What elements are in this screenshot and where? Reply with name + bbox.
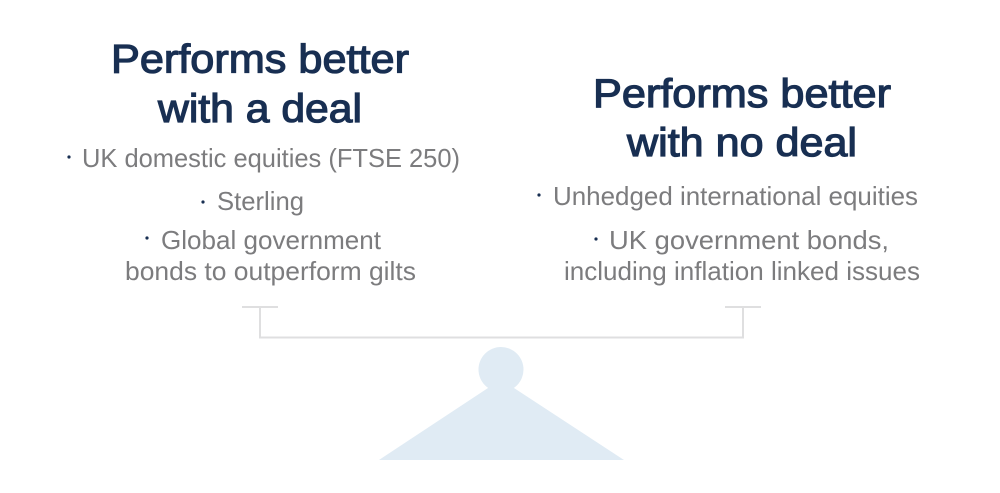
heading: with no deal xyxy=(593,72,891,165)
panel: performs better with a deal xyxy=(67,38,460,286)
heading: with a deal: Performs better xyxy=(111,38,409,82)
scale pivot and base xyxy=(379,347,624,460)
heading: with no deal: Performs better xyxy=(593,72,891,116)
icon: balance scale xyxy=(242,307,761,460)
heading: with a deal: with a deal xyxy=(157,87,362,131)
panel: performs better with no deal xyxy=(537,72,920,286)
list item: Global government bonds xyxy=(125,225,416,286)
heading: with a deal xyxy=(111,38,409,131)
list item: Sterling: Sterling xyxy=(217,186,304,216)
list item: Global government bonds: bonds to outperform gilts xyxy=(125,256,416,286)
list item: Unhedged international equities: Unhedged international equities xyxy=(553,181,918,211)
list item: Global government bonds: Global government xyxy=(161,225,382,255)
list item: UK domestic equities: UK domestic equities (FTSE 250) xyxy=(82,143,460,173)
list item: UK government bonds: including inflation linked issues xyxy=(564,256,920,286)
scale beam xyxy=(242,307,761,338)
list item: UK government bonds xyxy=(564,225,920,286)
list item: UK government bonds: UK government bonds, xyxy=(609,225,889,255)
heading: with no deal: with no deal xyxy=(626,121,857,165)
